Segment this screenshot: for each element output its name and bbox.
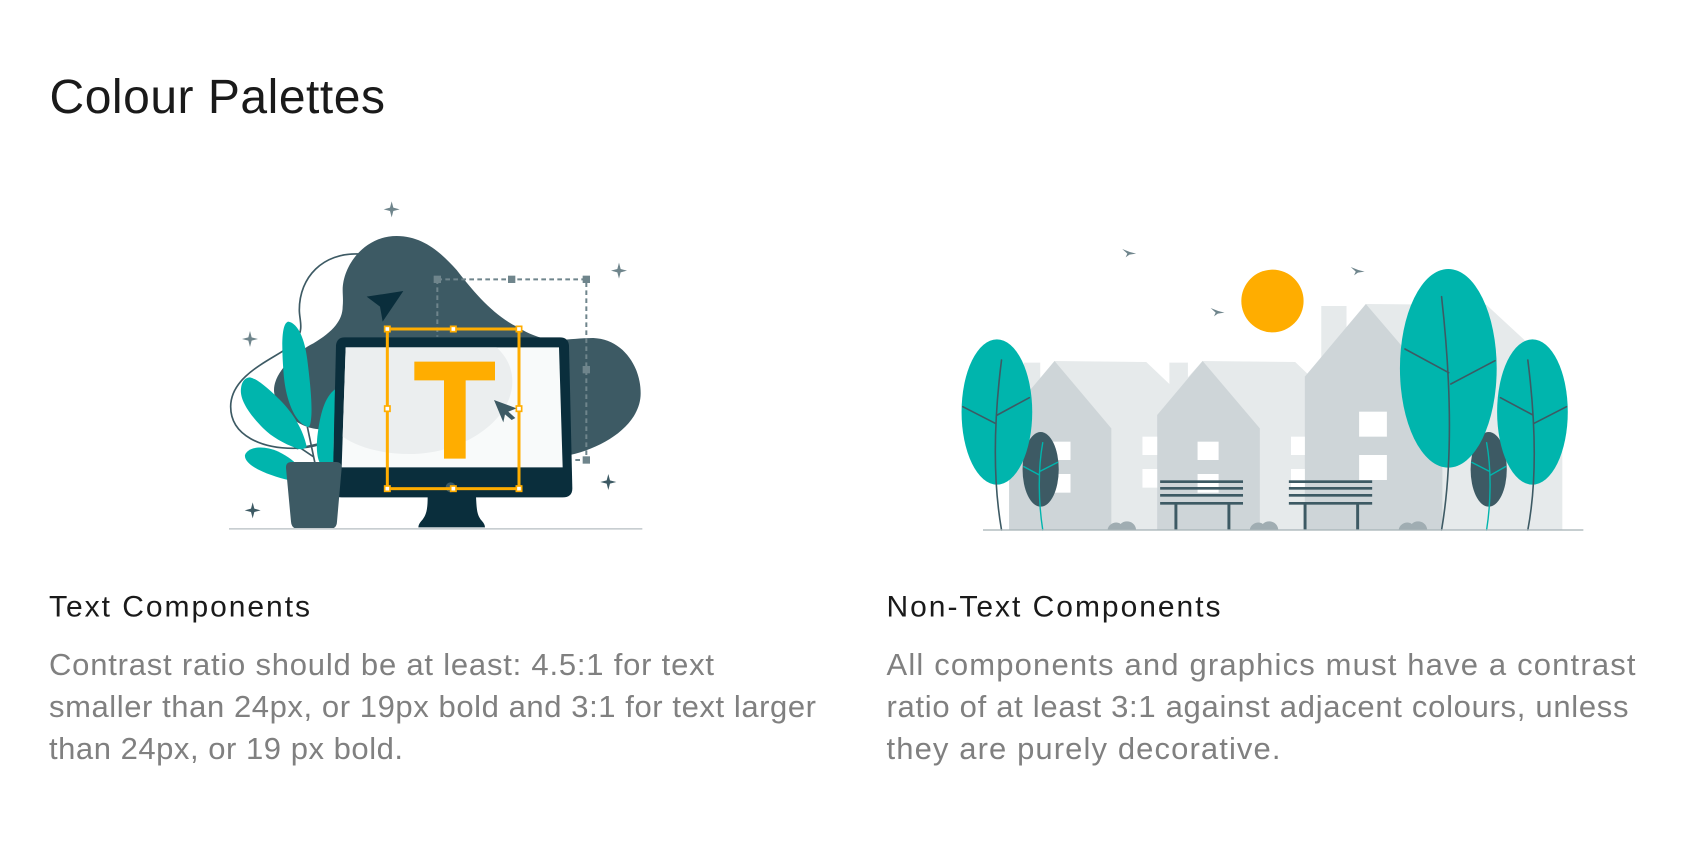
- panel: non-text components: [886, 590, 1636, 766]
- heading: Text Components: [49, 590, 310, 624]
- bench right: [1289, 480, 1372, 530]
- letter T: [414, 362, 495, 459]
- teal tree right: [1497, 339, 1568, 530]
- body text: All components and graphics must have a contrast: [886, 647, 1636, 682]
- bench left: [1160, 480, 1243, 530]
- sun: [1241, 270, 1304, 332]
- heading: Non-Text Components: [886, 590, 1220, 624]
- small dark tree left: [1023, 432, 1059, 530]
- plant pot: [286, 462, 342, 529]
- dark background blob: [274, 236, 641, 455]
- back buildings: [1024, 304, 1562, 530]
- ground line: [983, 529, 1583, 531]
- sparkles: [242, 201, 627, 518]
- monitor: [333, 337, 572, 527]
- teal tree large: [1400, 269, 1497, 530]
- teal tree left: [962, 339, 1032, 530]
- body text: they are purely decorative.: [886, 731, 1280, 766]
- panel: text components: [49, 590, 816, 766]
- front houses: [1009, 304, 1442, 530]
- illustration: houses and trees: [962, 249, 1583, 531]
- selection box: [385, 326, 522, 491]
- body text: Contrast ratio should be at least: 4.5:1 for text: [49, 647, 714, 682]
- bushes: [1108, 521, 1427, 530]
- body text: [49, 647, 816, 766]
- dashed guide with handles: [434, 276, 590, 464]
- second cursor: [494, 400, 517, 422]
- windows: [1051, 412, 1387, 493]
- dark cursor: [367, 291, 403, 322]
- birds: [1122, 249, 1365, 316]
- title: Colour Palettes: [50, 71, 385, 124]
- body text: smaller than 24px, or 19px bold and 3:1 for text larger: [49, 689, 816, 724]
- plant stems: [297, 427, 318, 463]
- body text: than 24px, or 19 px bold.: [49, 731, 403, 766]
- small dark tree right: [1471, 432, 1507, 530]
- body text: [886, 647, 1636, 766]
- ground line: [229, 528, 642, 530]
- body text: ratio of at least 3:1 against adjacent colours, unless: [886, 689, 1628, 724]
- outline squiggle: [231, 254, 358, 448]
- plant leaves: [241, 322, 335, 480]
- illustration: text on monitor: [229, 201, 642, 530]
